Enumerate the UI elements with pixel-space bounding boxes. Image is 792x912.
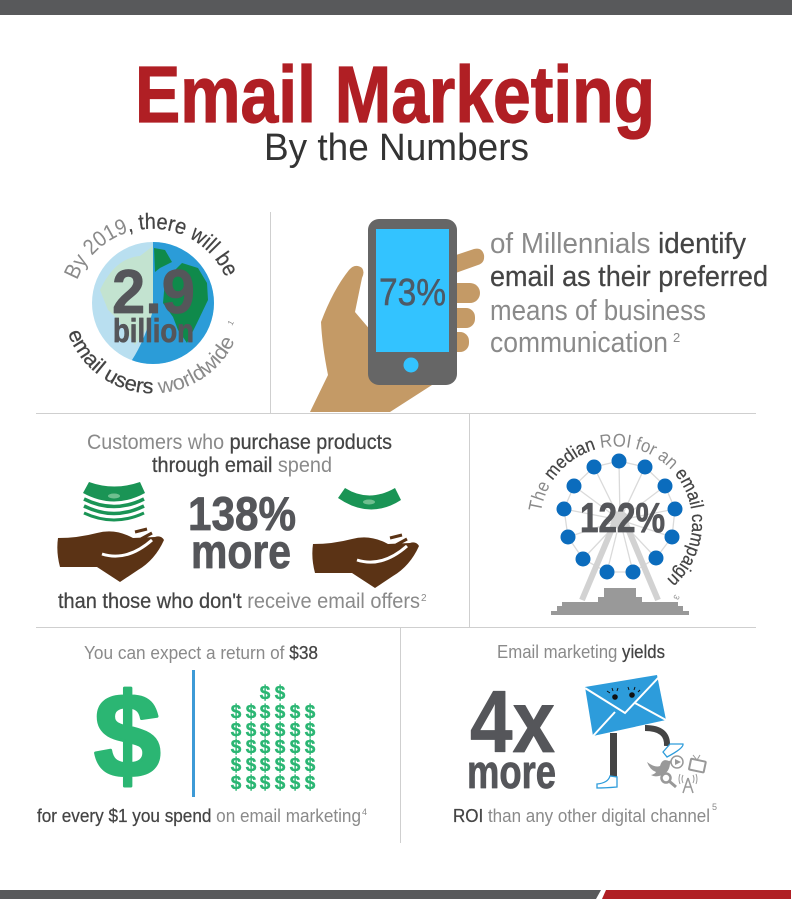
icon: grid of dollars: $ bbox=[260, 755, 271, 776]
icon: grid of dollars: $ bbox=[246, 755, 257, 776]
icon: right hand bbox=[312, 535, 419, 588]
text: for every $1: for every $1 you spend on email marketing bbox=[37, 805, 361, 826]
panel: 4x more bbox=[453, 641, 717, 826]
icon: grid of dollars: $ bbox=[260, 683, 271, 704]
icon: grid of dollars: $ bbox=[305, 773, 316, 794]
text: millennials: 2 bbox=[673, 330, 680, 345]
icon: left hand bbox=[57, 529, 164, 582]
icon: grid of dollars: $ bbox=[246, 773, 257, 794]
icon: grid of dollars: $ bbox=[260, 702, 271, 723]
icon: grid of dollars: $ bbox=[246, 737, 257, 758]
panel: return of $38 bbox=[37, 642, 367, 826]
panel: 2.9 billion globe bbox=[64, 212, 236, 394]
label more: more bbox=[467, 745, 556, 798]
panel: 73% millennials bbox=[310, 219, 768, 412]
icon: grid of dollars: $ bbox=[290, 720, 301, 741]
icon: grid of dollars: $ bbox=[290, 773, 301, 794]
text: millennials: email as their preferred bbox=[490, 261, 768, 293]
icon: grid of dollars: $ bbox=[290, 755, 301, 776]
text: customers: through email spend bbox=[152, 454, 332, 477]
icon: grid of dollars: $ bbox=[231, 702, 242, 723]
icon: grid of dollars: $ bbox=[275, 720, 286, 741]
subtitle: By the Numbers bbox=[264, 127, 529, 169]
panel: 4x more: 5 bbox=[712, 802, 717, 812]
curved text: median ROI: The median ROI for an email campaign bbox=[528, 434, 704, 585]
curved text: by 2019: By 2019, there will be bbox=[64, 212, 235, 279]
text: ROI than any other: ROI than any other digital channel bbox=[453, 805, 710, 826]
icon: grid of dollars: $ bbox=[260, 720, 271, 741]
icon: grid of dollars: $ bbox=[290, 702, 301, 723]
icon: ferris wheel bbox=[551, 454, 689, 615]
icon: large dollar: $ bbox=[94, 669, 161, 803]
text: than those: than those who don't receive email offers bbox=[58, 590, 420, 613]
icon: stack of money bbox=[83, 482, 145, 520]
icon: grid of dollars: $ bbox=[275, 683, 286, 704]
text: email marketing yields: Email marketing yields bbox=[497, 641, 665, 662]
number 4x: 4x bbox=[470, 672, 555, 771]
icon: grid of dollars: $ bbox=[305, 702, 316, 723]
label billion: billion bbox=[113, 312, 194, 349]
icon: grid of dollars: $ bbox=[246, 702, 257, 723]
text: customers bbox=[87, 431, 392, 477]
curved text: email users worldwide: email users worldwide bbox=[69, 330, 234, 394]
icon: grid of dollars: $ bbox=[246, 720, 257, 741]
title: Email Marketing bbox=[135, 50, 655, 139]
icon: grid of dollars: $ bbox=[275, 737, 286, 758]
label more: more bbox=[191, 526, 291, 579]
text: millennials: means of business bbox=[490, 295, 706, 327]
icon: walking envelope bbox=[585, 675, 683, 788]
icon: grid of dollars: $ bbox=[231, 737, 242, 758]
icon: grid of dollars: $ bbox=[260, 773, 271, 794]
panel: 138% more bbox=[57, 431, 427, 613]
icon: grid of dollars: $ bbox=[275, 773, 286, 794]
number 138%: 138% bbox=[188, 487, 296, 540]
icon: grid of dollars: $ bbox=[231, 773, 242, 794]
icon: grid of dollars: $ bbox=[290, 737, 301, 758]
text: expect a return: You can expect a return of $38 bbox=[84, 642, 318, 663]
icon: grid of dollars: $ bbox=[305, 737, 316, 758]
panel: return of $38: 4 bbox=[362, 807, 367, 817]
icon: grid of dollars bbox=[231, 683, 316, 794]
panel: 2.9 billion globe: 1 bbox=[226, 318, 236, 327]
icon: grid of dollars: $ bbox=[305, 755, 316, 776]
text: millennials: communication bbox=[490, 327, 668, 359]
icon: grid of dollars: $ bbox=[231, 720, 242, 741]
icon: single money note bbox=[338, 488, 401, 510]
text: customers: Customers who purchase products bbox=[87, 431, 392, 454]
icons: digital channels bbox=[647, 755, 706, 793]
number 122%: 122% bbox=[580, 494, 665, 541]
number 73%: 73% bbox=[379, 272, 446, 314]
number 2.9: 2.9 bbox=[112, 258, 195, 327]
globe bbox=[92, 242, 214, 364]
bottom bar bbox=[0, 890, 791, 899]
icon: grid of dollars: $ bbox=[231, 755, 242, 776]
text: millennials bbox=[490, 228, 768, 359]
icon: grid of dollars: $ bbox=[275, 702, 286, 723]
icon: grid of dollars: $ bbox=[260, 737, 271, 758]
divider: blue line bbox=[192, 670, 195, 797]
panel: 122% ROI ferris wheel bbox=[528, 434, 704, 615]
icon: grid of dollars: $ bbox=[305, 720, 316, 741]
icon: hand holding phone bbox=[310, 219, 484, 412]
panel: 122% ROI ferris wheel: 3 bbox=[671, 593, 681, 601]
text: millennials: of Millennials identify bbox=[490, 228, 746, 260]
panel: 138% more: 2 bbox=[421, 593, 427, 604]
icon: grid of dollars: $ bbox=[275, 755, 286, 776]
